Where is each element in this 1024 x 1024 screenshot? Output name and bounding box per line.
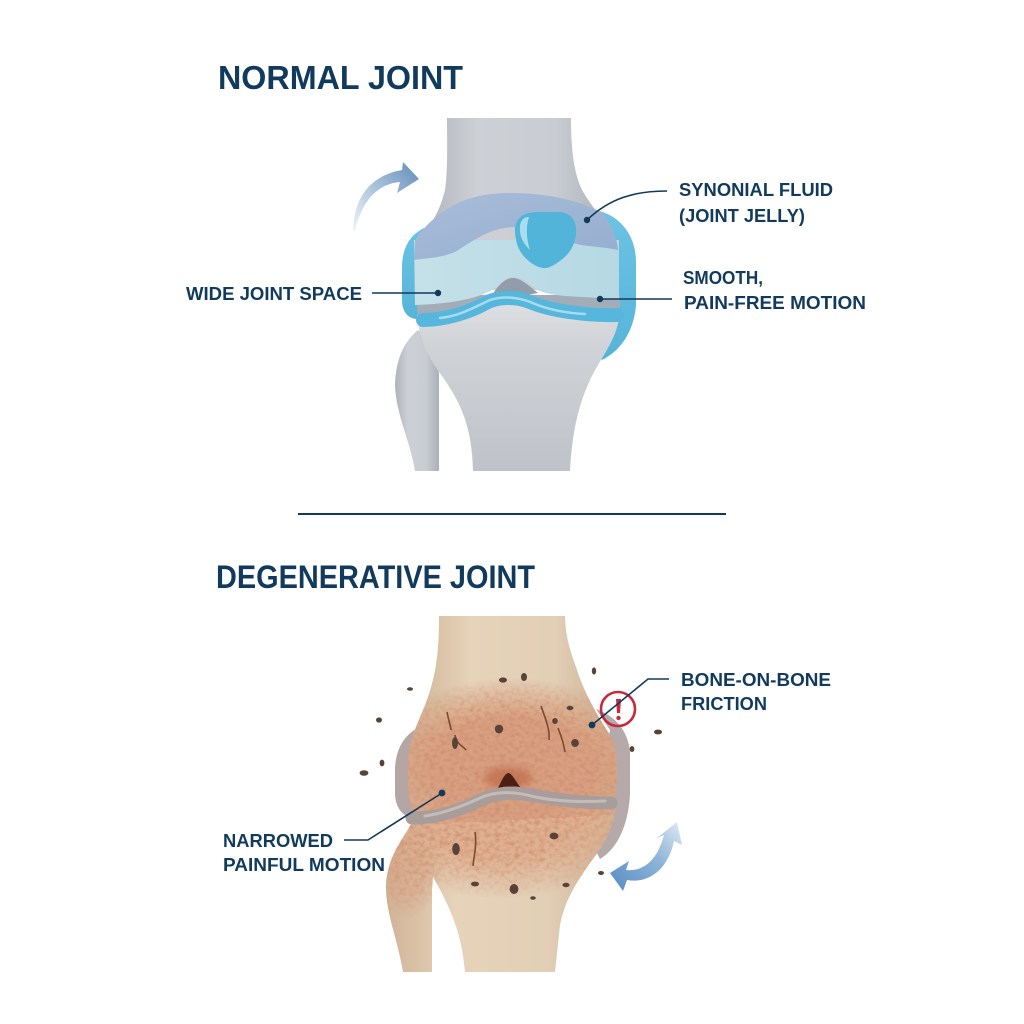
meniscus band: [423, 298, 617, 320]
reddish halo around crack: [484, 767, 532, 789]
callout: smooth motion: PAIN-FREE MOTION: [684, 292, 866, 313]
callout: synovial fluid: [584, 179, 833, 226]
callout: narrowed painful motion: PAINFUL MOTION: [223, 854, 385, 875]
divider: [298, 513, 726, 515]
meniscus highlight: [425, 793, 605, 816]
title: degenerative joint: DEGENERATIVE JOINT: [216, 559, 535, 595]
joint space cartilage: [414, 240, 619, 305]
callout: wide joint space: WIDE JOINT SPACE: [186, 283, 362, 304]
callout: bone-on-bone friction: [589, 669, 831, 728]
dark crack at joint centre: [498, 773, 521, 788]
right synovial capsule: [590, 211, 636, 360]
illustration: degenerated knee joint: [350, 616, 662, 972]
callout: bone-on-bone friction: FRICTION: [681, 693, 767, 714]
dark notch shadow: [494, 278, 538, 296]
synovial fluid gel blob: [515, 212, 576, 268]
bone debris particles: [360, 667, 662, 900]
right worn capsule: [590, 709, 630, 859]
callout: wide joint space: [186, 283, 441, 304]
arrow: double-headed painful motion: [610, 822, 682, 891]
callout: bone-on-bone friction: BONE-ON-BONE: [681, 669, 831, 690]
tibia erosion texture: [386, 807, 616, 909]
upper cap layer: [414, 193, 618, 260]
warning icon: [601, 692, 635, 726]
femur: [408, 616, 617, 820]
callout: smooth motion: [597, 267, 866, 313]
callout: narrowed painful motion: [223, 790, 445, 875]
femur: [420, 118, 612, 290]
callout: synovial fluid: (JOINT JELLY): [679, 205, 805, 226]
left worn capsule: [395, 726, 425, 819]
meniscus highlight: [440, 297, 585, 318]
illustration: healthy knee joint: [395, 118, 636, 471]
title: normal joint: NORMAL JOINT: [218, 59, 463, 96]
callout: synovial fluid: SYNONIAL FLUID: [679, 179, 833, 200]
arrow: motion: [353, 162, 419, 231]
gel highlight: [520, 217, 530, 250]
tibia and fibula: [386, 785, 616, 972]
callout: smooth motion: SMOOTH,: [683, 267, 763, 288]
fibula: [395, 330, 439, 471]
left synovial capsule: [402, 228, 430, 319]
femur erosion texture: [408, 682, 618, 824]
callout: narrowed painful motion: NARROWED: [223, 830, 333, 851]
hairline fractures: [447, 706, 565, 866]
thinned meniscus: [412, 793, 611, 818]
grey cartilage layer: [416, 295, 620, 318]
tibia: [417, 290, 620, 471]
